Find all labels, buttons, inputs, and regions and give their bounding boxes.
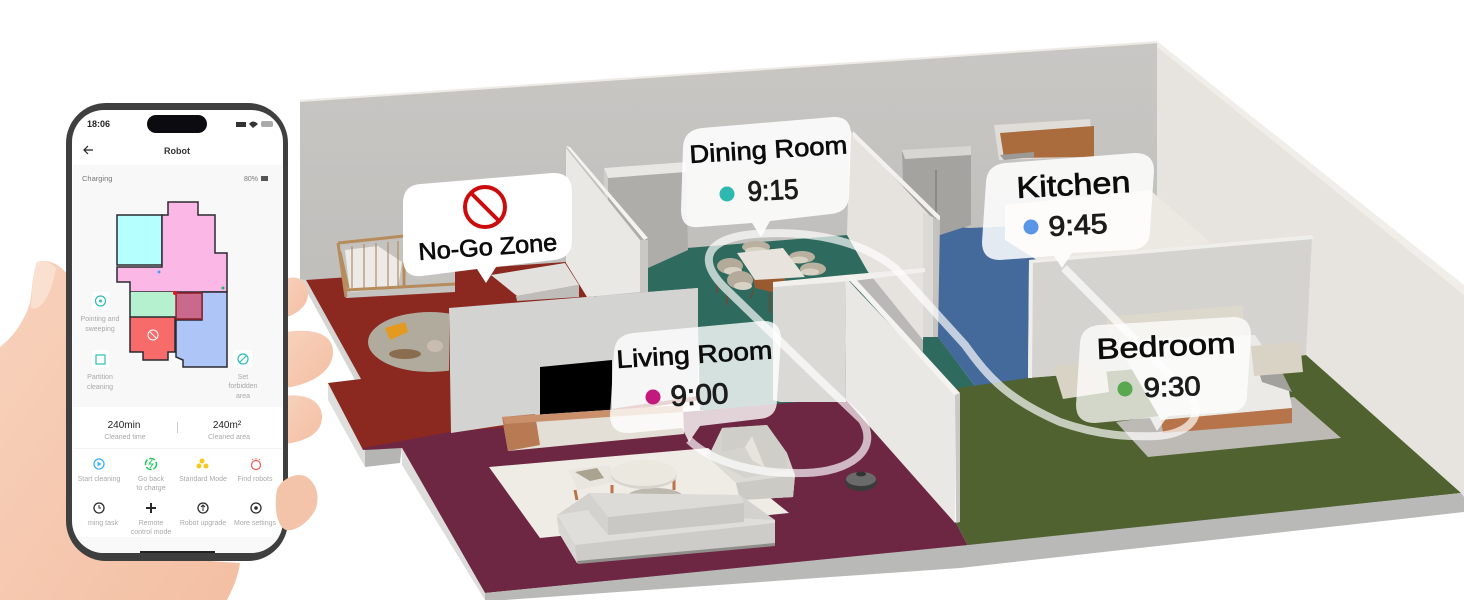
side action: set forbidden area: area: [236, 393, 250, 400]
side action: set forbidden area: Set: [238, 374, 248, 381]
side action: partition cleaning: cleaning: [87, 384, 113, 391]
callout: living room: Living Room: [616, 337, 773, 374]
callout: living room: 9:00: [670, 378, 729, 413]
phone: [66, 103, 288, 561]
status bar: 18:06: [87, 119, 110, 129]
floor map: [117, 202, 227, 367]
callout: bedroom: 9:30: [1143, 371, 1201, 403]
floor: living room purple: [363, 400, 968, 593]
bedroom back wall: [1028, 235, 1314, 378]
callout: bedroom: Bedroom: [1096, 328, 1236, 366]
living room back wall: [449, 288, 698, 433]
callout: kitchen: 9:45: [1048, 208, 1108, 242]
action: robot upgrade: Robot upgrade: [180, 520, 226, 527]
stat: cleaned area: 240m²: [213, 420, 242, 431]
kitchen divider wall: [847, 130, 940, 340]
armchair sofa: [708, 425, 795, 500]
action: more settings: [234, 503, 277, 527]
action: start cleaning: Start cleaning: [78, 476, 121, 483]
status bar: [87, 115, 273, 133]
action: standard mode: [179, 458, 227, 483]
callout: bedroom: [1076, 317, 1251, 431]
callout: kitchen: Kitchen: [1016, 166, 1131, 205]
robot vacuum: [845, 472, 877, 491]
stat: cleaned time: [104, 420, 146, 439]
floor slab edge: [402, 448, 1464, 600]
bedroom rug: [1116, 397, 1341, 457]
floor: bedroom green: [956, 355, 1461, 546]
callout: no-go zone: No-Go Zone: [418, 229, 558, 266]
small floor mattress: [491, 263, 579, 301]
floor: no-go zone red: [300, 262, 700, 467]
nightstands: [1053, 342, 1303, 399]
door panel: [604, 162, 688, 270]
action: remote control mode: [131, 503, 171, 536]
stat: cleaned time: 240min: [108, 420, 140, 431]
action: start cleaning: [78, 459, 121, 483]
map panel: [73, 165, 282, 407]
action: remote control mode: Remote: [139, 520, 163, 527]
action: standard mode: Standard Mode: [179, 476, 227, 483]
callout: dining room: Dining Room: [689, 131, 848, 169]
action: go back to charge: to charge: [136, 485, 166, 492]
stat: cleaned area: Cleaned area: [208, 434, 250, 441]
bed: [1107, 305, 1292, 433]
tv and stand: [502, 360, 684, 451]
callout: dining room: [681, 117, 851, 237]
crib: [338, 236, 455, 298]
side action: set forbidden area: [228, 353, 258, 398]
action: timing task: [88, 503, 118, 527]
action: more settings: More settings: [234, 520, 277, 527]
charging status: 80%: [244, 176, 258, 183]
action: timing task: ming task: [88, 520, 118, 527]
action: remote control mode: control mode: [131, 529, 171, 536]
side action: partition cleaning: [87, 354, 113, 390]
side action: partition cleaning: Partition: [87, 374, 113, 381]
charging status: Charging: [82, 174, 112, 183]
side action: set forbidden area: forbidden: [228, 383, 258, 390]
center partition wall: [773, 268, 960, 523]
callout: kitchen: [982, 153, 1154, 268]
action: find robots: Find robots: [237, 476, 273, 483]
dining table and chairs: [717, 241, 826, 313]
hand behind phone: [0, 261, 333, 600]
side action: pointing and sweeping: [81, 295, 119, 332]
action: robot upgrade: [180, 503, 226, 527]
floor: dining teal: [648, 235, 975, 410]
main sofa: [557, 493, 775, 564]
floor: kitchen blue: [938, 225, 1090, 386]
coffee tables: [568, 460, 683, 506]
charging status: [82, 176, 268, 182]
app header: [84, 146, 190, 156]
fridge: [902, 146, 971, 235]
back left partition: [566, 146, 648, 297]
middle gray wall: [850, 268, 923, 352]
callout: living room: [610, 321, 781, 442]
action: go back to charge: Go back: [138, 476, 165, 483]
action: go back to charge: [136, 458, 166, 492]
stat: cleaned area: [208, 420, 250, 439]
round play rug: [368, 312, 449, 372]
pinky fingertip over phone: [276, 475, 318, 530]
kitchen counter: [1005, 190, 1210, 262]
callout: dining room: 9:15: [747, 173, 799, 207]
side action: pointing and sweeping: Pointing and: [81, 316, 120, 323]
cleaning route: [689, 233, 1196, 473]
living room carpet: [489, 448, 789, 538]
kitchen wall cabinet: [994, 119, 1094, 160]
side action: pointing and sweeping: sweeping: [85, 326, 115, 333]
callout: no-go zone: [403, 173, 572, 283]
app header: Robot: [164, 146, 190, 156]
room shell: [300, 41, 1464, 497]
stat: cleaned time: Cleaned time: [104, 434, 146, 441]
action: find robots: [238, 458, 272, 481]
